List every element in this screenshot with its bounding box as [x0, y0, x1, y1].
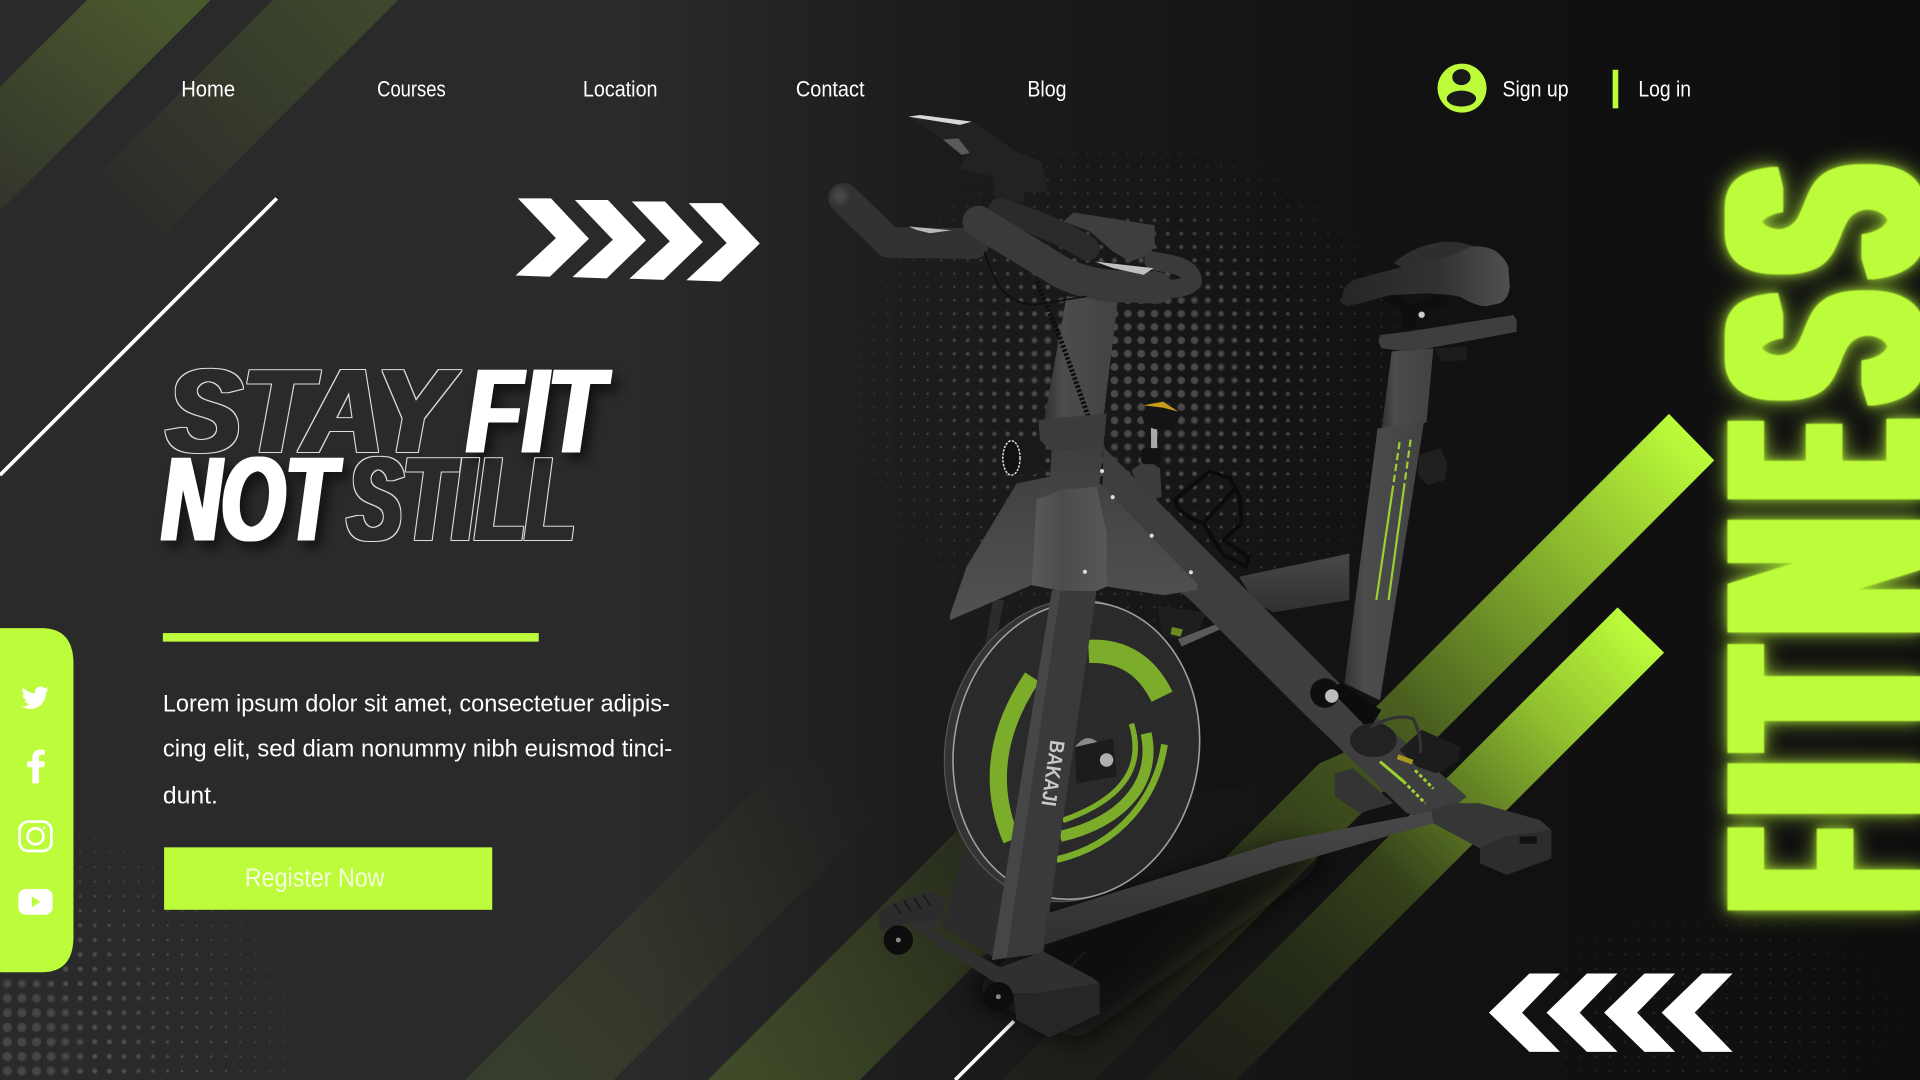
flywheel green arcs — [998, 651, 1164, 860]
brand label: BAKAJI — [1036, 739, 1068, 808]
icon: user avatar — [1438, 64, 1487, 113]
navigation — [181, 77, 1691, 102]
second handle tube — [1000, 211, 1087, 249]
green rule — [163, 633, 539, 642]
seat post — [1344, 346, 1467, 700]
icon: facebook — [27, 750, 45, 783]
button: Register Now — [164, 847, 492, 910]
frame bar — [1043, 812, 1434, 945]
flywheel — [921, 580, 1223, 922]
headline: FIT: FIT — [467, 345, 610, 478]
halftone dots: bottom left — [2, 837, 285, 1076]
diagonal stripe: bottom B — [708, 715, 1224, 1080]
floor shadow — [967, 845, 1335, 1041]
nav: Home: Home — [181, 77, 235, 102]
post collar — [1038, 413, 1107, 450]
flywheel hub — [1075, 738, 1117, 784]
lime stripe: lower — [1145, 607, 1664, 1080]
rear handlebar — [833, 189, 973, 244]
seat clamp — [1382, 295, 1450, 330]
halftone dots: centre — [860, 140, 1396, 622]
paragraph: dunt. — [163, 782, 218, 809]
diagonal stripe: top left 1 — [0, 0, 211, 211]
headline — [162, 345, 610, 566]
paragraph: Lorem ipsum dolor sit amet, consectetuer adipis- — [163, 690, 670, 717]
paragraph — [163, 690, 672, 809]
post stripes — [1376, 440, 1411, 600]
diagonal stripe: top left 2 — [22, 0, 398, 251]
icon: twitter — [21, 686, 49, 709]
front fork leg — [992, 590, 1097, 960]
rear foot — [1431, 803, 1551, 875]
button: Register Now: Register Now — [245, 865, 385, 893]
white diagonal line: bottom — [955, 951, 1085, 1080]
saddle — [1342, 242, 1510, 306]
nav: Location: Location — [583, 77, 658, 102]
icon: instagram — [20, 822, 51, 851]
exercise bike — [833, 115, 1551, 1041]
nav: Log in: Log in — [1638, 77, 1691, 102]
frame housing behind flywheel — [1176, 576, 1359, 793]
halftone dots: bottom right — [1551, 924, 1887, 1072]
paragraph: cing elit, sed diam nonummy nibh euismod tinci- — [163, 736, 672, 763]
crank and pedal — [1310, 678, 1460, 773]
handlebar grip highlight — [1095, 262, 1153, 275]
nav divider — [1613, 70, 1618, 108]
nav: Contact: Contact — [796, 77, 864, 102]
seat rail — [1378, 315, 1517, 352]
console pad — [1063, 212, 1155, 262]
down tube — [1102, 447, 1467, 823]
front handlebar — [978, 222, 1193, 289]
water bottle cage — [1175, 471, 1248, 567]
height knob — [1003, 441, 1041, 475]
shroud — [950, 447, 1198, 620]
shroud screws — [1083, 469, 1193, 574]
tablet holder — [908, 115, 1048, 203]
drive mechanism — [1157, 606, 1228, 647]
white diagonal line: top left — [0, 198, 277, 475]
tube lower stripe — [1380, 762, 1433, 803]
diagonal stripe: bottom A — [465, 763, 931, 1080]
vertical neon title: FITNESS — [1672, 170, 1920, 906]
nav: Blog: Blog — [1027, 77, 1067, 102]
coiled cable — [984, 252, 1090, 443]
rear fork leg — [943, 600, 1016, 960]
lime stripe: upper — [1003, 414, 1714, 1080]
nav: Courses: Courses — [377, 77, 446, 102]
chevron arrows: left pointing — [1489, 973, 1733, 1052]
nav: Sign up: Sign up — [1502, 77, 1569, 102]
main post — [1044, 296, 1118, 419]
headline: STILL: STILL — [348, 433, 576, 566]
front foot — [878, 891, 1100, 1037]
icon: youtube — [18, 889, 53, 915]
headline: NOT: NOT — [162, 433, 341, 566]
resistance knob — [1131, 402, 1179, 502]
social panel — [0, 628, 73, 972]
frame connecting tube — [1239, 553, 1349, 612]
chevron arrows: right pointing — [516, 198, 760, 282]
headline: STAY: STAY — [167, 345, 460, 478]
rear foot, far side — [1335, 768, 1393, 813]
